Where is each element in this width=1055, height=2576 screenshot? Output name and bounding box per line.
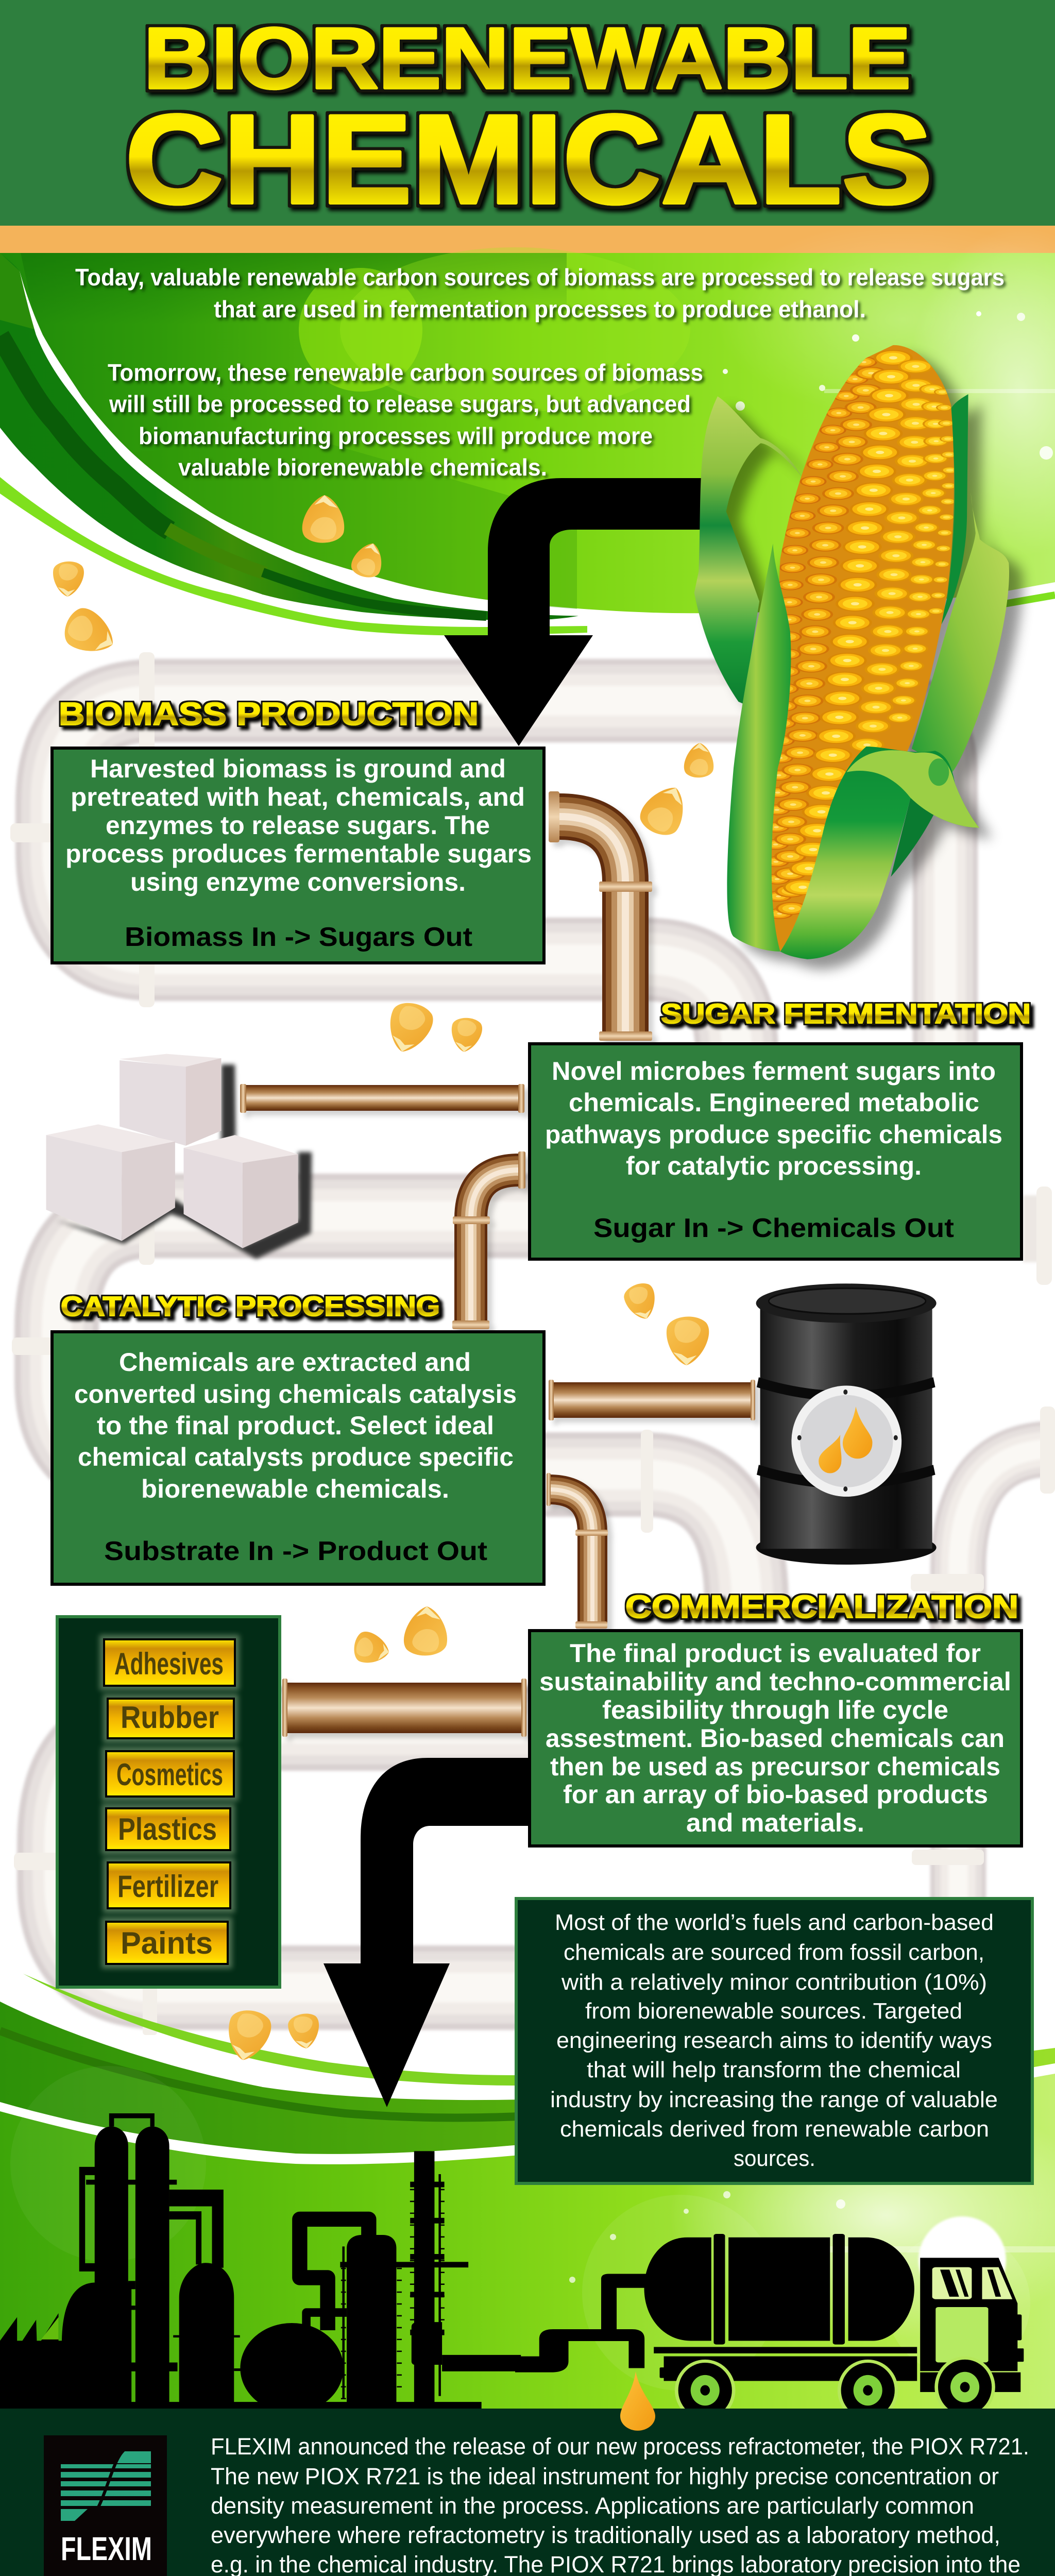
text: fermentation description: Novel microbes ferment sugars into bbox=[552, 1057, 996, 1086]
chassis bbox=[654, 2347, 917, 2381]
corn kernels scattered bbox=[53, 495, 713, 2064]
text: catalysis description: biorenewable chemicals. bbox=[141, 1475, 449, 1503]
button: paints: Paints bbox=[121, 1926, 213, 1960]
text: biomass description: Harvested biomass is ground and bbox=[90, 754, 506, 783]
text: commercialization description: feasibility through life cycle bbox=[602, 1696, 948, 1724]
text: fossil carbon context: Most of the world’s fuels and carbon-based bbox=[555, 1910, 994, 1935]
intro text bbox=[75, 264, 1005, 481]
barrel label with oil drops bbox=[791, 1386, 901, 1497]
text: biomass description: enzymes to release sugars. The bbox=[106, 811, 490, 840]
intro text: that are used in fermentation processes to produce ethanol. bbox=[214, 296, 866, 323]
copper pipe: catalysis to barrel bbox=[549, 1380, 755, 1420]
button: plastics: Plastics bbox=[118, 1812, 217, 1846]
text: FLEXIM announcement: density measurement in the process. Applications are particularly common bbox=[211, 2493, 974, 2519]
panel: sugar fermentation bbox=[530, 998, 1031, 1259]
panel: fossil carbon context bbox=[516, 1899, 1032, 2183]
corn kernels bbox=[763, 336, 960, 960]
panel: catalytic processing bbox=[52, 1291, 544, 1584]
icon: FLEXIM logo: FLEXIM bbox=[61, 2530, 152, 2567]
button: adhesives: Adhesives bbox=[114, 1647, 224, 1681]
icon: FLEXIM logo bbox=[44, 2435, 167, 2576]
text: catalysis description: to the final product. Select ideal bbox=[97, 1411, 494, 1440]
text: biomass description: Biomass In -> Sugars Out bbox=[125, 922, 472, 952]
text: catalysis description: converted using chemicals catalysis bbox=[74, 1380, 517, 1409]
tanker truck silhouette bbox=[515, 2234, 1024, 2421]
footer panel bbox=[0, 2409, 1055, 2576]
top green swoosh background bbox=[0, 222, 1055, 636]
text: fermentation description bbox=[545, 1057, 1002, 1243]
sugar cubes bbox=[46, 1054, 312, 1259]
button: fertilizer: Fertilizer bbox=[117, 1869, 218, 1904]
background pipes bbox=[57, 701, 1055, 1988]
text: catalysis description: chemical catalysts produce specific bbox=[78, 1443, 514, 1471]
text: catalysis description bbox=[74, 1348, 517, 1566]
text: FLEXIM announcement: everywhere where refractometry is traditionally used as a laboratory method, bbox=[211, 2522, 1000, 2548]
text: commercialization description: sustainability and techno-commercial bbox=[539, 1667, 1011, 1696]
text: fossil carbon context: with a relatively minor contribution (10%) bbox=[561, 1970, 987, 1995]
button: adhesives bbox=[99, 1635, 240, 1690]
heading: sugar fermentation: SUGAR FERMENTATION bbox=[661, 998, 1031, 1029]
text: fossil carbon context: industry by increasing the range of valuable bbox=[550, 2087, 998, 2112]
title bbox=[125, 10, 932, 230]
panel: products list bbox=[57, 1617, 280, 1987]
heading: catalytic processing: CATALYTIC PROCESSING bbox=[61, 1291, 440, 1322]
text: fermentation description: chemicals. Engineered metabolic bbox=[569, 1088, 979, 1117]
button: cosmetics bbox=[101, 1747, 239, 1801]
oil barrel bbox=[756, 1283, 937, 1565]
button: rubber bbox=[103, 1694, 239, 1743]
text: commercialization description: for an array of bio-based products bbox=[563, 1780, 988, 1809]
text: fossil carbon context: chemicals are sourced from fossil carbon, bbox=[564, 1940, 984, 1965]
text: fermentation description: pathways produce specific chemicals bbox=[545, 1120, 1002, 1149]
icon: oil drop from tanker bbox=[620, 2371, 655, 2431]
intro text: Today, valuable renewable carbon sources of biomass are processed to release sugars bbox=[75, 264, 1005, 291]
text: fermentation description: Sugar In -> Chemicals Out bbox=[593, 1213, 954, 1243]
text: biomass description: process produces fermentable sugars bbox=[65, 839, 532, 868]
right cube bbox=[183, 1135, 298, 1248]
title: BIORENEWABLE bbox=[144, 10, 911, 107]
bottom green landscape background bbox=[0, 1974, 1055, 2421]
copper elbow: catalysis to commercialization bbox=[547, 1473, 608, 1629]
title: CHEMICALS bbox=[125, 89, 932, 230]
text: biomass description: using enzyme conversions. bbox=[130, 868, 466, 896]
button: cosmetics: Cosmetics bbox=[116, 1757, 223, 1792]
intro text: will still be processed to release sugars, but advanced bbox=[109, 391, 691, 417]
back husks bbox=[694, 394, 968, 877]
text: fossil carbon context: sources. bbox=[734, 2146, 815, 2171]
discharge pipe bbox=[515, 2329, 644, 2372]
text: fossil carbon context bbox=[550, 1910, 998, 2171]
text: fermentation description: for catalytic processing. bbox=[626, 1151, 922, 1180]
text: catalysis description: Substrate In -> Product Out bbox=[104, 1536, 487, 1566]
text: commercialization description bbox=[539, 1639, 1011, 1837]
intro text: biomanufacturing processes will produce more bbox=[139, 422, 653, 449]
copper elbow: fermentation to catalysis bbox=[452, 1151, 525, 1329]
button: fertilizer bbox=[103, 1858, 235, 1913]
text: FLEXIM announcement: FLEXIM announced the release of our new process refractometer, the PIOX R721. bbox=[211, 2433, 1029, 2460]
text: commercialization description: The final product is evaluated for bbox=[570, 1639, 981, 1668]
heading: biomass production: BIOMASS PRODUCTION bbox=[59, 697, 479, 732]
intro text: valuable biorenewable chemicals. bbox=[178, 454, 547, 481]
text: commercialization description: and materials. bbox=[686, 1808, 864, 1837]
button: paints bbox=[101, 1917, 232, 1969]
text: fossil carbon context: from biorenewable sources. Targeted bbox=[585, 1998, 962, 2024]
corn cob illustration bbox=[694, 336, 1009, 960]
text: catalysis description: Chemicals are extracted and bbox=[119, 1348, 471, 1377]
factory silhouette bbox=[0, 2113, 521, 2413]
header banner bbox=[0, 0, 1055, 253]
text: FLEXIM announcement bbox=[211, 2433, 1029, 2576]
text: FLEXIM announcement: The new PIOX R721 is the ideal instrument for highly precise concentration or bbox=[211, 2463, 999, 2489]
tank bbox=[644, 2234, 914, 2345]
wheels bbox=[675, 2357, 995, 2421]
text: biomass description bbox=[65, 754, 532, 952]
copper pipe: sugar cubes to fermentation bbox=[240, 1084, 524, 1113]
front husks bbox=[727, 493, 1009, 959]
button: rubber: Rubber bbox=[121, 1700, 219, 1735]
arrow: corn to biomass production bbox=[444, 478, 721, 746]
copper pipe: commercialization to products bbox=[282, 1679, 526, 1737]
intro text: Tomorrow, these renewable carbon sources of biomass bbox=[108, 359, 703, 386]
text: commercialization description: then be used as precursor chemicals bbox=[550, 1752, 1000, 1781]
left cube bbox=[46, 1124, 175, 1241]
text: fossil carbon context: that will help transform the chemical bbox=[587, 2057, 961, 2082]
top cube bbox=[120, 1054, 221, 1146]
text: biomass description: pretreated with heat, chemicals, and bbox=[71, 783, 525, 811]
text: fossil carbon context: engineering research aims to identify ways bbox=[556, 2028, 992, 2053]
cab bbox=[920, 2258, 1024, 2392]
copper pipes bbox=[240, 791, 755, 1737]
button: plastics bbox=[101, 1804, 235, 1855]
text: commercialization description: assestment. Bio-based chemicals can bbox=[546, 1724, 1005, 1753]
text: fossil carbon context: chemicals derived from renewable carbon bbox=[560, 2116, 989, 2142]
panel: commercialization bbox=[530, 1589, 1022, 1846]
arrow: commercialization to factory bbox=[324, 1758, 536, 2107]
copper elbow: biomass to sugar bbox=[549, 791, 652, 1041]
heading: commercialization: COMMERCIALIZATION bbox=[625, 1589, 1018, 1625]
panel: biomass production bbox=[52, 697, 544, 963]
